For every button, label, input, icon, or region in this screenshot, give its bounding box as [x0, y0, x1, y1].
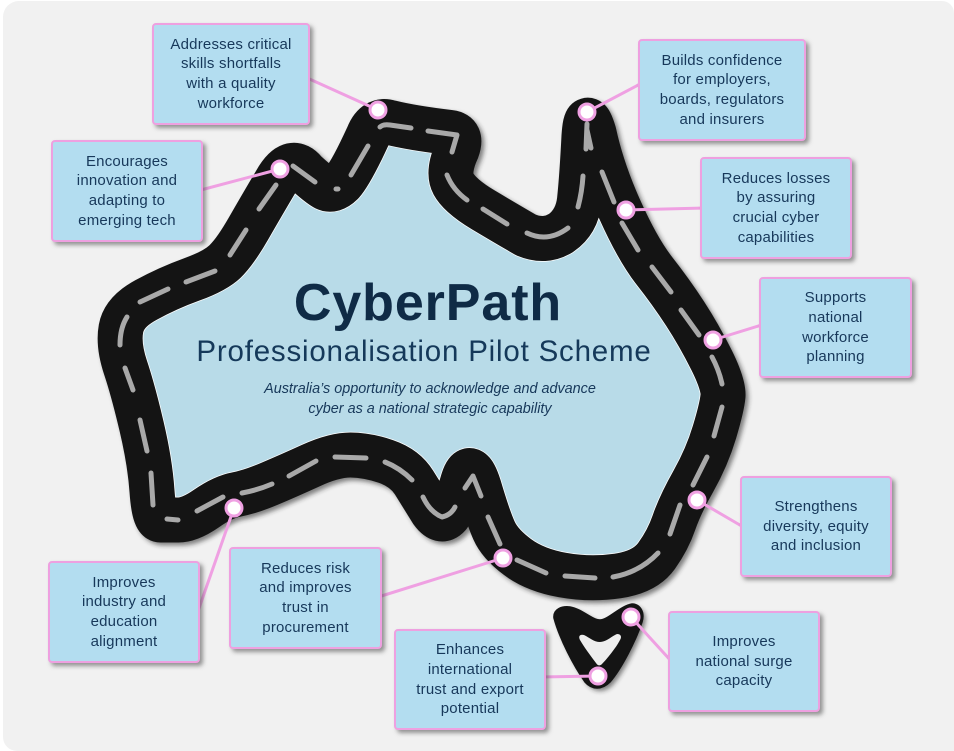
callout: procurement: Reduces risk	[261, 560, 350, 577]
connector lines	[197, 77, 765, 677]
callout: surge capacity	[668, 611, 820, 712]
callout: skills shortfalls: skills shortfalls	[181, 55, 281, 72]
callout: international trust: Enhances	[436, 641, 504, 658]
callout: education alignment: Improves	[92, 574, 156, 591]
callout: education alignment: education	[91, 613, 157, 630]
callout: skills shortfalls	[152, 23, 310, 125]
Tasmania road	[554, 604, 643, 688]
callout: innovation: emerging tech	[78, 212, 176, 229]
subtitle: Professionalisation Pilot Scheme	[196, 335, 652, 368]
connector nodes	[226, 102, 721, 684]
callout: reduces losses: by assuring	[737, 189, 815, 206]
callout: confidence: for employers,	[673, 71, 771, 88]
callout: reduces losses: crucial cyber	[733, 209, 819, 226]
callout: education alignment	[48, 561, 200, 663]
callout: surge capacity: national surge	[695, 653, 793, 670]
callout: reduces losses: Reduces losses	[722, 170, 830, 187]
callout: workforce planning: workforce	[802, 328, 869, 346]
callout: confidence: and insurers	[680, 111, 764, 128]
callout: workforce planning: Supports	[805, 289, 866, 306]
callout: skills shortfalls: with a quality	[186, 75, 276, 92]
title block	[196, 274, 652, 417]
road surface	[120, 120, 723, 578]
callout: education alignment: industry and	[82, 593, 166, 610]
callout: procurement: trust in	[282, 599, 329, 616]
tagline	[264, 381, 596, 417]
callout: innovation	[51, 140, 203, 242]
callout: procurement: and improves	[259, 579, 352, 596]
callout: reduces losses: capabilities	[738, 229, 814, 246]
callout: diversity: diversity, equity	[763, 518, 869, 535]
tagline: Australia’s opportunity to acknowledge and advance	[264, 381, 596, 397]
callout: surge capacity: capacity	[716, 672, 772, 689]
callout: diversity: and inclusion	[771, 537, 861, 554]
callout: international trust: international	[428, 661, 512, 678]
callout: workforce planning: national	[808, 309, 863, 326]
callout: procurement: procurement	[262, 619, 349, 636]
callout: education alignment: alignment	[91, 633, 157, 650]
callout: innovation: Encourages	[86, 153, 168, 170]
callout: confidence	[638, 39, 806, 141]
callout: diversity	[740, 476, 892, 577]
callout: workforce planning	[759, 277, 912, 378]
road shadow	[123, 123, 726, 691]
callout: skills shortfalls: Addresses critical	[170, 36, 292, 53]
callout: reduces losses	[700, 157, 852, 259]
callout: confidence: Builds confidence	[662, 52, 782, 69]
title: CyberPath	[294, 274, 562, 332]
callout: international trust: potential	[441, 700, 499, 717]
callout: confidence: boards, regulators	[660, 91, 784, 108]
callout: innovation: innovation and	[77, 172, 177, 189]
map of Australia road	[97, 78, 759, 694]
callout: diversity: Strengthens	[774, 498, 858, 515]
callout: surge capacity: Improves	[712, 633, 776, 650]
road centre dashes	[120, 124, 722, 578]
callout: innovation: adapting to	[89, 192, 165, 209]
callout: skills shortfalls: workforce	[198, 95, 264, 112]
land fill	[120, 120, 723, 578]
callout: procurement	[229, 547, 382, 649]
callout: workforce planning: planning	[806, 348, 865, 365]
callout: international trust	[394, 629, 546, 730]
callout: international trust: trust and export	[416, 680, 524, 698]
tagline: cyber as a national strategic capability	[308, 401, 552, 417]
road edge highlight	[142, 145, 700, 556]
